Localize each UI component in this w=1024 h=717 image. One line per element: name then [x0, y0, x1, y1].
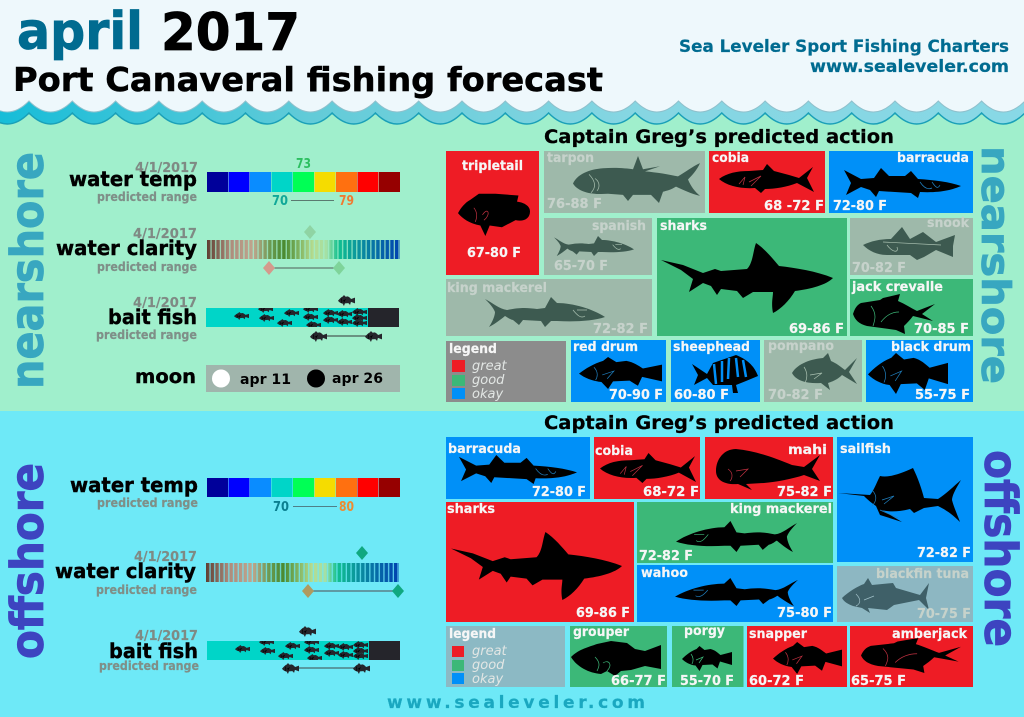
tile: sailfish	[837, 437, 973, 562]
company name and website	[679, 37, 1009, 77]
tile: king mackerel	[446, 279, 652, 337]
tile: black drum: black drum	[891, 339, 971, 355]
tile: offshore barracuda: barracuda	[448, 441, 521, 457]
tile: grouper: grouper	[573, 624, 629, 640]
panel: nearshore fish tiles	[446, 150, 973, 403]
tile: cobia: cobia	[712, 150, 749, 166]
tile: grouper: 66-77 F	[611, 673, 666, 689]
offshore water temp: 70	[273, 500, 289, 515]
nearshore moon: moon	[135, 366, 196, 388]
tile: red drum: 70-90 F	[609, 387, 663, 403]
offshore water temp: predicted range	[97, 496, 198, 510]
tile: offshore king mackerel: king mackerel	[730, 501, 832, 517]
title: april 2017	[17, 2, 300, 63]
nearshore bait fish: 4/1/2017	[133, 296, 197, 311]
nearshore moon: apr 26	[332, 371, 383, 387]
tile: tarpon	[544, 150, 705, 213]
tile: barracuda: barracuda	[897, 150, 969, 166]
offshore bait fish	[99, 626, 400, 674]
tile: spanish: 65-70 F	[554, 258, 608, 274]
nearshore water temp: 4/1/2017	[135, 161, 198, 176]
offshore water clarity	[55, 546, 404, 598]
tile: blackfin tuna: blackfin tuna	[876, 566, 969, 582]
nearshore water temp: 70	[272, 194, 288, 209]
tile: blackfin tuna: 70-75 F	[917, 606, 971, 622]
tile: snapper	[747, 626, 847, 689]
tile: red drum	[571, 339, 666, 403]
tile: sheephead: 60-80 F	[674, 387, 729, 403]
nearshore water clarity: water clarity	[56, 236, 197, 260]
panel: nearshore conditions	[56, 157, 400, 392]
nearshore water temp	[69, 157, 400, 209]
vertical label: offshore left: offshore	[1, 463, 54, 659]
tile: pompano: pompano	[768, 338, 834, 354]
tile: wahoo	[637, 565, 833, 622]
tile: pompano: 70-82 F	[768, 387, 823, 403]
nearshore moon: apr 11	[240, 372, 291, 388]
tile: offshore barracuda: 72-80 F	[532, 484, 586, 500]
legend: nearshore: okay	[472, 387, 503, 402]
company name and website: Sea Leveler Sport Fishing Charters	[679, 37, 1009, 57]
tile: sheephead: sheephead	[673, 339, 750, 355]
tile: tarpon: 76-88 F	[547, 196, 602, 212]
legend: nearshore: legend	[449, 341, 497, 357]
title: april 2017: april	[17, 2, 143, 62]
tile: barracuda	[829, 150, 973, 214]
offshore water clarity: water clarity	[55, 559, 196, 583]
header background	[0, 0, 1024, 125]
tile: spanish: spanish	[592, 218, 646, 234]
tile: offshore sharks	[446, 501, 634, 622]
tile: tripletail: 67-80 F	[467, 245, 521, 261]
nearshore water temp: 73	[296, 157, 311, 172]
offshore water temp: water temp	[70, 473, 198, 497]
tile: offshore cobia: cobia	[595, 443, 633, 459]
nearshore water clarity: predicted range	[97, 260, 197, 274]
vertical label: nearshore right: nearshore	[972, 146, 1017, 384]
tile: king mackerel: 72-82 F	[593, 321, 648, 337]
nearshore water clarity: 4/1/2017	[133, 227, 197, 242]
tile: offshore sharks: 69-86 F	[576, 605, 630, 621]
tile: snook	[850, 215, 973, 276]
legend: offshore: great	[472, 644, 508, 659]
tile: sharks	[657, 218, 847, 337]
tile: offshore king mackerel: 72-82 F	[639, 548, 693, 564]
tile: porgy: 55-70 F	[680, 673, 734, 689]
tile: black drum	[866, 339, 973, 403]
tile: spanish	[544, 218, 652, 275]
tile: mahi: 75-82 F	[777, 484, 832, 500]
tile: amberjack	[850, 626, 973, 689]
legend: offshore	[446, 626, 565, 687]
tile: snapper: 60-72 F	[749, 673, 804, 689]
tile: snapper: snapper	[749, 626, 807, 642]
tile: mahi: mahi	[788, 442, 827, 458]
tile: wahoo: wahoo	[641, 565, 688, 581]
tile: tarpon: tarpon	[547, 150, 594, 166]
nearshore water temp: predicted range	[97, 190, 197, 204]
legend: offshore: okay	[472, 672, 503, 687]
offshore background	[0, 411, 1024, 717]
nearshore water temp: water temp	[69, 167, 197, 191]
subtitle: Port Canaveral fishing forecast	[13, 60, 603, 99]
tile: jack crevalle: jack crevalle	[851, 279, 943, 295]
nearshore background	[0, 112, 1024, 411]
tile: cobia	[709, 150, 825, 214]
tile: grouper	[570, 624, 667, 689]
wave band	[0, 101, 1024, 124]
tile: red drum: red drum	[573, 339, 638, 355]
offshore bait fish: bait fish	[109, 639, 198, 663]
tile: blackfin tuna	[837, 566, 973, 622]
legend: nearshore: great	[472, 359, 508, 374]
tile: jack crevalle: 70-85 F	[914, 321, 969, 337]
tile: amberjack: 65-75 F	[851, 673, 906, 689]
tile: snook: 70-82 F	[852, 260, 906, 276]
tile: black drum: 55-75 F	[915, 387, 970, 403]
tile: barracuda: 72-80 F	[833, 198, 887, 214]
vertical label: nearshore left: nearshore	[1, 152, 54, 389]
tile: sailfish: 72-82 F	[917, 545, 971, 561]
tile: pompano	[764, 338, 862, 403]
tile: tripletail	[446, 151, 539, 275]
tile: jack crevalle	[850, 279, 973, 337]
tile: sharks: sharks	[660, 218, 707, 234]
tile: king mackerel: king mackerel	[447, 280, 547, 296]
offshore water temp	[70, 473, 400, 515]
tile: porgy	[672, 623, 744, 689]
tile: offshore cobia	[594, 437, 700, 500]
panel: offshore conditions	[55, 473, 404, 674]
offshore bait fish: predicted range	[99, 659, 199, 673]
tile: sailfish: sailfish	[840, 441, 891, 457]
nearshore bait fish	[96, 295, 399, 342]
heading: nearshore predicted action: Captain Greg’s predicted action	[544, 126, 894, 148]
nearshore water clarity	[56, 225, 400, 275]
tile: offshore sharks: sharks	[447, 501, 495, 517]
tile: offshore barracuda	[446, 437, 590, 500]
title: april 2017: 2017	[161, 3, 300, 63]
tile: cobia: 68 -72 F	[764, 198, 824, 214]
offshore water clarity: 4/1/2017	[134, 550, 197, 565]
company name and website: www.sealeveler.com	[810, 57, 1009, 77]
nearshore moon	[135, 365, 400, 392]
tile: mahi	[705, 437, 833, 500]
offshore water temp: 80	[339, 500, 354, 515]
tile: sheephead	[671, 339, 760, 403]
tile: amberjack: amberjack	[892, 626, 968, 642]
tile: tripletail: tripletail	[462, 158, 523, 174]
tile: sharks: 69-86 F	[789, 321, 844, 337]
nearshore bait fish: bait fish	[108, 305, 197, 329]
footer website: www.sealeveler.com	[387, 693, 645, 713]
tile: snook: snook	[927, 215, 970, 231]
tile: offshore cobia: 68-72 F	[643, 484, 699, 500]
legend: offshore: good	[472, 658, 505, 673]
nearshore bait fish: predicted range	[96, 328, 197, 342]
tile: porgy: porgy	[684, 623, 725, 639]
legend: nearshore: good	[472, 373, 505, 388]
heading: offshore predicted action: Captain Greg’s predicted action	[544, 412, 894, 434]
tile: wahoo: 75-80 F	[777, 605, 832, 621]
legend: nearshore	[446, 341, 566, 402]
panel: offshore fish tiles	[446, 437, 973, 689]
legend: offshore: legend	[449, 626, 496, 642]
offshore bait fish: 4/1/2017	[135, 629, 198, 644]
nearshore water temp: 79	[339, 194, 354, 209]
offshore water clarity: predicted range	[96, 583, 197, 597]
tile: offshore king mackerel	[637, 501, 833, 564]
